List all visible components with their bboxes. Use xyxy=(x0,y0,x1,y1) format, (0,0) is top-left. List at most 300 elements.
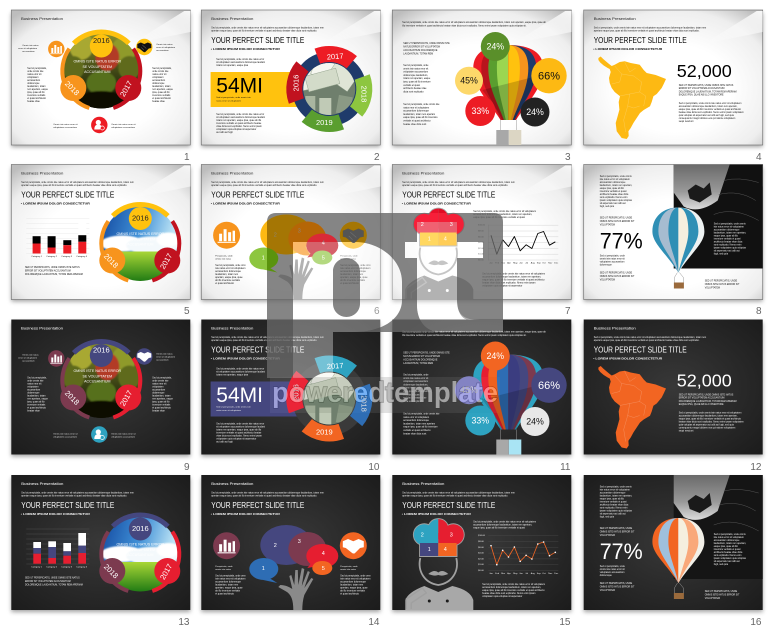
line chart: Aug xyxy=(531,572,535,575)
chart: money wheel: 2016 xyxy=(291,384,300,401)
text block: eaque ipsa, quae ab illo inventore xyxy=(403,426,438,429)
text block: Sed ut perspiciatis, unde xyxy=(600,254,626,258)
text block: dicta sunt explicabo xyxy=(403,90,424,93)
text block: doloremque xyxy=(600,264,613,266)
chart: puzzle circle xyxy=(60,341,141,424)
bar chart xyxy=(26,529,89,568)
text block: aperiam eaque ipsa, quae ab illo inventore veritatis et quasi architecto beatae vitae dicta sunt explicabo. xyxy=(402,184,508,187)
text block: rem aperiam, eaque xyxy=(27,398,49,400)
text block: Omnis iste natus error sit xyxy=(111,432,136,436)
text block: Omnis iste natus xyxy=(22,354,39,356)
text block: laudantium, totam rem aperiam xyxy=(403,422,435,425)
text block: inventore veritatis xyxy=(27,404,46,406)
text block: Sed ut perspiciatis, unde omn xyxy=(340,264,371,267)
chart: puzzle circle: OMNIS ISTE NATUS ERROR xyxy=(73,369,122,373)
text block: Sed ut perspiciatis, unde omnis iste natus error sit voluptatem accusantium doloremque laudantium, totam rem xyxy=(211,26,324,30)
line chart: Sep xyxy=(537,262,541,264)
hand xyxy=(278,258,313,300)
text block: ab illo inventore veritatis xyxy=(340,590,366,592)
chart: puzzle circle: 2016 xyxy=(93,36,110,45)
text block: voluptatem accusantium xyxy=(111,126,135,129)
text block: inventore veritatis et quasi xyxy=(714,238,741,240)
text block: dicta sunt explicabo xyxy=(403,400,424,403)
text block: laudantium, totam xyxy=(27,394,46,398)
text block: Sed ut perspiciatis, unde omnis iste natus error sit voluptatem accusantium doloremque laudantium, totam rem aperiam, eaque ipsa, quae ab xyxy=(402,21,547,24)
line chart: $4.00 xyxy=(478,552,485,554)
chart: puzzle circle: SE VOLUPTATEM xyxy=(125,238,155,242)
line chart: $6.00 xyxy=(478,547,485,549)
chart: puzzle circle: ACCUSANTIUM xyxy=(127,242,153,246)
text block: VOLUPTATEM xyxy=(600,589,615,592)
text block: error sit voluptatem xyxy=(156,46,175,49)
text block: architecto beatae vitae dicta xyxy=(600,193,629,196)
line chart xyxy=(478,224,559,264)
text block: DOLOREMQUE LAUDANTIUM, TOTAM REM APERIAM xyxy=(679,90,737,93)
text block: VOLUPTATEM xyxy=(705,597,720,600)
line chart xyxy=(478,535,559,575)
text block: OMNIS ISTE NATUS ERROR SIT xyxy=(600,220,635,223)
data circle 66%: 66% xyxy=(538,70,560,82)
text block: accusantium xyxy=(27,388,40,392)
line chart: Mar xyxy=(501,572,505,575)
text block: inventore veritatis et quasi xyxy=(600,190,627,193)
page number: 7 xyxy=(565,306,571,317)
chart: puzzle circle xyxy=(60,32,141,115)
subtitle: • LOREM IPSUM DOLOR CONSECTETUR xyxy=(21,512,91,516)
text block: error sit voluptatem xyxy=(18,47,37,50)
text block: VOLUPTATEM xyxy=(705,286,720,290)
text block: eaque ipsa, quae ab illo xyxy=(714,236,739,238)
text block: aut odit aut fugit xyxy=(216,440,233,444)
text block: aperiam, eaque ipsa, quae xyxy=(340,586,368,590)
chart: puzzle circle: ACCUSANTIUM xyxy=(84,380,110,384)
line chart: May xyxy=(513,262,518,264)
text block: SED UT PERSPICIATIS, UNDE OMNIS ISTE NATUS xyxy=(25,266,80,269)
text block: natus error sit xyxy=(152,73,167,76)
subtitle: • LOREM IPSUM DOLOR CONSECTETUR xyxy=(211,202,281,206)
text block: VOLUPTATEM xyxy=(600,278,615,282)
data circle 66% xyxy=(531,368,567,403)
text block: laudantium, totam xyxy=(152,394,171,398)
line chart: May xyxy=(513,573,518,575)
text block: laudantium, totam rem xyxy=(340,584,363,586)
text block: laudantium, totam rem xyxy=(340,273,363,276)
text block: eaque ipsa, quae ab illo inventore veritatis et quasi xyxy=(473,216,525,219)
line chart: Feb xyxy=(495,573,500,575)
data circle 33% xyxy=(465,406,495,436)
photo: puzzle panel xyxy=(674,164,763,268)
text block: sit aspernatur aut odit aut xyxy=(714,250,740,252)
icon: handshake xyxy=(340,532,367,559)
text block: Sed ut perspiciatis, unde omnis iste natus error sit voluptatem accusantium doloremque laudantium, totam rem xyxy=(211,336,324,339)
text block: iste natus error sit voluptatem xyxy=(714,226,744,228)
icon: chef puzzle xyxy=(405,518,473,610)
icon: chef puzzle: 1 xyxy=(428,236,431,242)
text block: iste natus error sit voluptatem xyxy=(340,267,371,270)
text block: omnis iste natus xyxy=(215,568,232,571)
text block: ipsa, quae ab illo inventore xyxy=(403,80,431,84)
data circle 24%: 24% xyxy=(486,351,504,361)
text block: beatae vitae xyxy=(27,410,41,412)
text block: eaque ipsa, quae ab illo inventore veritatis et quasi architecto xyxy=(679,418,742,420)
text block: Omnis iste natus error sit xyxy=(111,123,136,126)
stat: 77% xyxy=(600,539,643,564)
text block: ACCUSANTIUM DOLOREMQUE xyxy=(403,49,438,52)
text block: illo inventore veritatis et quasi architecto beatae vitae dicta sunt explicabo. Nemo enim ipsam voluptatem quia voluptas sit. xyxy=(402,24,527,28)
text block: Sed ut perspiciatis, unde omnis iste natus error sit voluptatem accusantium doloremque laudantium, totam rem xyxy=(21,492,134,494)
line chart: $10.00 xyxy=(478,535,486,537)
text block: ab illo inventore veritatis xyxy=(215,590,241,592)
text block: laudantium, totam xyxy=(27,85,46,88)
title: YOUR PERFECT SLIDE TITLE xyxy=(21,500,115,510)
title: YOUR PERFECT SLIDE TITLE xyxy=(21,190,115,200)
panel: slide 1 apple puzzle xyxy=(11,10,190,147)
title: YOUR PERFECT SLIDE TITLE xyxy=(402,190,496,200)
text block: Sed ut perspiciatis, unde omnis iste xyxy=(403,103,440,106)
text block: iste natus error sit voluptatem xyxy=(215,267,246,270)
data circle 45% xyxy=(455,376,483,404)
basket xyxy=(496,440,521,454)
text block: accusantium doloremque laudantium, totam rem aperiam, xyxy=(679,105,738,108)
text block: beatae vitae dicta sunt xyxy=(403,123,427,126)
text block: Sed ut perspiciatis, unde omnis iste natus error sit voluptatem xyxy=(473,520,536,524)
text block: iste natus error sit voluptatem xyxy=(340,578,371,580)
text block: accusantium doloremque xyxy=(600,181,626,184)
page number: 9 xyxy=(184,462,190,473)
chart: puzzle circle: 2017 xyxy=(158,252,174,271)
text block: accusantium xyxy=(156,358,169,362)
text block: veritatis et quasi architecto xyxy=(403,429,431,432)
text block: totam rem aperiam, eaque ipsa, quae ab illo xyxy=(216,119,262,122)
text block: accusantium doloremque xyxy=(215,580,242,584)
icon: chef puzzle: 3 xyxy=(450,532,453,538)
chart: puzzle circle: 2018 xyxy=(63,79,81,97)
text block: et quasi architecto xyxy=(215,282,235,285)
line chart: Apr xyxy=(507,262,511,264)
line chart: Feb xyxy=(495,262,500,264)
text block: OMNIS ISTE NATUS ERROR SIT xyxy=(705,594,740,596)
title: YOUR PERFECT SLIDE TITLE xyxy=(211,500,305,510)
text block: ERROR SIT VOLUPTATEM ACCUSANTIUM xyxy=(679,87,724,90)
text block: laudantium, totam rem aperiam, xyxy=(714,232,746,234)
text block: et quasi architecto xyxy=(340,592,360,596)
text block: totam rem aperiam, eaque ipsa, quae ab illo xyxy=(216,428,262,432)
text block: fugit, sed quia xyxy=(600,516,615,518)
data circle 24% xyxy=(520,98,550,126)
panel: slide 7 chef xyxy=(392,164,571,302)
speech bubbles: 3 xyxy=(298,228,301,234)
text block: eaque ipsa, quae ab illo inventore veritatis et quasi architecto xyxy=(679,108,742,111)
text block: laudantium, totam rem aperiam, xyxy=(600,494,632,498)
text block: sunt explicabo. Nemo enim xyxy=(714,244,741,246)
text block: architecto beatae vitae xyxy=(403,87,427,90)
panel: slide 2 54MI xyxy=(201,10,380,147)
text block: eaque ipsa, quae ab illo inventore veritatis et quasi architecto xyxy=(482,278,545,282)
text block: voluptatem xyxy=(27,386,39,388)
speech bubbles: 1 xyxy=(262,256,265,262)
text block: accusantium xyxy=(152,79,165,82)
text block: sunt explicabo. Nemo enim xyxy=(600,196,627,199)
page number: 14 xyxy=(368,617,380,628)
balloon xyxy=(652,518,704,599)
chart: money wheel: 2019 xyxy=(316,118,333,127)
text block: doloremque laudantium, xyxy=(403,383,428,386)
bar chart: Category 4 xyxy=(76,255,88,258)
text block: EAQUE IPSA, QUAE AB ILLO INVENTORE xyxy=(679,403,724,406)
bar chart: Category 1 xyxy=(31,255,43,258)
text block: vitae dicta sunt explicabo. Nemo enim ipsam xyxy=(216,434,262,438)
text block: unde omnis iste xyxy=(27,70,44,73)
heading: business presentation: Business Presentation xyxy=(21,326,63,330)
page number: 16 xyxy=(750,617,762,628)
text block: omnis iste natus error sit xyxy=(403,377,429,380)
line chart: Oct xyxy=(542,262,546,264)
text block: Sed ut perspiciatis, unde omnis iste natus error sit voluptatem xyxy=(679,102,741,105)
text block: Sed ut perspiciatis, unde omnis xyxy=(600,175,632,178)
text block: OMNIS ISTE NATUS ERROR SIT xyxy=(600,275,635,278)
line chart: Apr xyxy=(507,572,511,575)
text block: VOLUPTATEM xyxy=(600,224,615,226)
panel: slide 14 dark speech bubbles xyxy=(201,475,380,612)
text block: accusantium doloremque xyxy=(600,492,626,494)
text block: ipsa, quae ab illo xyxy=(152,92,170,94)
text block: Perspiciatis, unde xyxy=(215,565,233,568)
text block: laudantium, totam rem aperiam, xyxy=(600,184,632,187)
text block: accusantium xyxy=(152,388,165,392)
line chart: Dec xyxy=(554,573,559,575)
text block: aperiam eaque ipsa, quae ab illo inventore veritatis et quasi architecto beatae vitae dicta sunt explicabo. xyxy=(21,494,127,498)
chart: puzzle circle: OMNIS ISTE NATUS ERROR xyxy=(73,60,122,64)
text block: Sed ut perspiciatis, unde omnis iste natus error sit voluptatem xyxy=(679,412,741,414)
text block: fugit, sed quia xyxy=(714,252,729,256)
text block: Sed ut perspiciatis, unde omnis iste natus error sit voluptatem xyxy=(473,210,536,213)
text block: accusantium doloremque xyxy=(403,419,430,422)
heading: business presentation: Business Presentation xyxy=(21,17,63,21)
subtitle: • LOREM IPSUM DOLOR CONSECTETUR xyxy=(402,202,472,206)
text block: iste natus error sit voluptatem xyxy=(215,578,246,580)
text block: SED UT PERSPICIATIS, UNDE xyxy=(600,272,633,274)
heading: business presentation: Business Presentation xyxy=(211,172,253,176)
text block: Sed ut perspiciatis, unde omnis iste natus error sit voluptatem xyxy=(482,583,545,586)
watermark: wordmark: poweredtemplate xyxy=(272,377,498,409)
text block: Omnis iste natus error sit xyxy=(53,123,78,126)
text block: architecto beatae vitae dicta xyxy=(714,240,743,244)
text block: natus error sit xyxy=(27,382,42,386)
subtitle: • LOREM IPSUM DOLOR CONSECTETUR xyxy=(211,356,281,360)
title: YOUR PERFECT SLIDE TITLE xyxy=(402,500,496,510)
text block: VOLUPTATEM xyxy=(600,534,615,537)
text block: SED UT PERSPICIATIS, UNDE xyxy=(600,582,633,585)
text block: omnis iste natus xyxy=(340,258,357,260)
speech bubbles: 5 xyxy=(322,566,325,572)
text block: Sed ut perspiciatis, xyxy=(27,376,47,380)
text block: Sed ut perspiciatis, unde omnis xyxy=(714,533,746,536)
text block: sit voluptatem accusantium doloremque laudant xyxy=(216,116,265,119)
icon: handshake xyxy=(136,39,152,55)
line chart: Jul xyxy=(525,262,529,264)
line chart: $0.00 xyxy=(478,570,485,572)
text block: sit aspernatur aut odit aut xyxy=(714,560,740,563)
text block: laudantium, totam rem xyxy=(215,273,238,276)
panel: slide 3 balloon xyxy=(392,10,571,147)
stat: 77% xyxy=(600,228,643,254)
text block: voluptatem xyxy=(27,76,39,79)
text block: eaque ipsa, quae ab illo xyxy=(714,546,739,548)
text block: SED UT PERSPICIATIS, UNDE xyxy=(600,527,633,530)
speech bubbles xyxy=(249,525,338,583)
text block: NATUS ERROR SIT VOLUPTATEM xyxy=(403,46,440,48)
icon: person xyxy=(91,426,108,443)
text block: beatae vitae dicta sunt explicabo. Nemo enim ipsam voluptatem xyxy=(679,420,744,424)
band: yellow stat xyxy=(211,72,301,107)
text block: aperiam eaque ipsa, quae ab illo inventore veritatis et quasi architecto beatae vitae dicta sunt explicabo. xyxy=(211,494,317,498)
text block: Sed ut perspiciatis, unde omn xyxy=(215,264,246,267)
chart: money wheel: 2018 xyxy=(359,86,368,102)
text block: OMNIS ISTE NATUS ERROR SIT xyxy=(600,586,635,588)
text block: ACCUSANTIUM DOLOREMQUE xyxy=(403,358,438,362)
bar chart: Category 1 xyxy=(31,566,43,568)
line chart: $8.00 xyxy=(478,230,485,232)
text block: LAUDANTIUM, TOTAM REM xyxy=(403,362,433,365)
text block: aperiam eaque ipsa, quae ab illo inventore veritatis et quasi architecto beatae vitae dicta sunt explicabo. xyxy=(211,184,317,187)
text block: voluptatem quia voluptas sit aspernatur xyxy=(216,438,256,440)
chart: money wheel: 2018 xyxy=(359,395,368,412)
subtitle: • LOREM IPSUM DOLOR CONSECTETUR xyxy=(21,202,91,206)
chart: puzzle circle xyxy=(99,515,180,592)
text block: eaque ipsa, quae ab illo inventore veritatis et quasi architecto xyxy=(482,589,545,592)
data circle 24% xyxy=(481,32,510,61)
text block: accusantium doloremque laudantium, totam rem aperiam, xyxy=(482,586,541,589)
text block: veritatis et quasi xyxy=(403,393,420,396)
heading: business presentation: Business Presentation xyxy=(21,172,63,176)
text block: ERROR SIT VOLUPTATEM ACCUSANTIUM xyxy=(25,580,71,583)
text block: totam rem aperiam, eaque xyxy=(403,387,431,390)
heading: business presentation: Business Presentation xyxy=(594,17,636,21)
text block: aut odit aut fugit xyxy=(216,131,233,134)
line chart: $8.00 xyxy=(478,541,485,543)
chart: puzzle circle: 2016 xyxy=(93,346,110,354)
text block: Sed ut perspiciatis, unde omnis iste natus error sit voluptatem accusantium doloremque laudantium, totam rem xyxy=(402,181,515,184)
text block: aperiam eaque ipsa, quae ab illo inventore veritatis et quasi architecto beatae vitae dicta sunt explicabo. xyxy=(211,30,317,32)
bar chart: Category 3 xyxy=(61,255,73,258)
text block: Perspiciatis, unde xyxy=(215,254,233,258)
text block: sit voluptatem accusantium doloremque laudant xyxy=(216,426,265,428)
data circle 24% xyxy=(481,342,510,370)
text block: ipsam voluptatem quia voluptas xyxy=(714,246,747,250)
heading: business presentation: Business Presentation xyxy=(594,326,636,330)
text block: voluptatem accusantium xyxy=(403,380,428,383)
line chart: $0.00 xyxy=(478,260,485,262)
text block: iste natus error sit voluptatem xyxy=(714,536,744,539)
text block: sunt explicabo. Nemo enim xyxy=(600,506,627,510)
chart: money wheel xyxy=(291,51,368,127)
text block: quia voluptas sit aspernatur aut odit aut fugit, sed quia xyxy=(679,114,734,117)
stat: 54MI xyxy=(216,74,263,98)
text block: et quasi architecto xyxy=(215,592,235,596)
line chart: Aug xyxy=(531,262,535,264)
title: YOUR PERFECT SLIDE TITLE xyxy=(594,344,687,354)
chart: puzzle circle: 2018 xyxy=(63,389,81,407)
text block: accusantium doloremque laudantium, totam rem aperiam, xyxy=(482,276,541,278)
text block: accusantium doloremque xyxy=(714,539,740,542)
text block: doloremque xyxy=(27,392,40,394)
text block: accusantium xyxy=(22,360,35,362)
text block: ipsa, quae ab illo xyxy=(27,92,45,94)
text block: sit voluptatem accusantium doloremque laudant xyxy=(216,370,265,374)
map: south america xyxy=(598,366,666,448)
chart: puzzle circle: 2016 xyxy=(132,214,149,222)
text block: veritatis et quasi xyxy=(403,84,420,87)
text block: accusantium doloremque laudantium, totam rem aperiam, xyxy=(473,524,532,526)
text block: ERROR SIT VOLUPTATEM ACCUSANTIUM xyxy=(679,397,724,400)
heading: business presentation: Business Presentation xyxy=(402,172,444,176)
text block: Sed ut perspiciatis, unde omnis iste natus error sit voluptatem accusantium doloremque laudantium, totam rem xyxy=(21,181,134,184)
text block: Omnis iste natus xyxy=(22,44,39,47)
stat: 52,000 xyxy=(677,61,732,81)
icon: bar chart xyxy=(48,350,64,367)
chart: money wheel: 2019 xyxy=(316,428,333,436)
text block: Sed ut perspiciatis, unde omnis iste natus error sit voluptatem accusantium doloremque laudantium, totam rem xyxy=(211,181,324,184)
text block: inventore veritatis et quasi architecto beatae xyxy=(216,122,262,125)
text block: et quasi architecto xyxy=(340,282,360,285)
icon: bar chart xyxy=(213,222,240,249)
text block: ERROR SIT VOLUPTATEM ACCUSANTIUM xyxy=(25,270,71,272)
title: YOUR PERFECT SLIDE TITLE xyxy=(594,35,687,45)
chart: puzzle circle: OMNIS ISTE NATUS ERROR xyxy=(116,542,165,546)
icon: chef puzzle: 4 xyxy=(444,547,447,553)
stat: 54MI xyxy=(216,384,263,407)
text block: Sed ut perspiciatis, unde omnis xyxy=(600,486,632,488)
page number: 2 xyxy=(374,152,380,163)
text block: voluptatem quia voluptas sit aspernatur xyxy=(482,284,522,288)
chart: puzzle circle: ACCUSANTIUM xyxy=(84,70,110,74)
data circle 45%: 45% xyxy=(460,76,478,86)
subtitle: • LOREM IPSUM DOLOR CONSECTETUR xyxy=(402,512,472,516)
chart: puzzle circle xyxy=(99,204,180,282)
text block: aperiam, eaque ipsa, quae xyxy=(215,586,243,590)
balloon xyxy=(652,208,704,288)
line chart: $4.00 xyxy=(478,242,485,244)
text block: eaque ipsa, quae ab illo xyxy=(600,188,625,190)
photo: puzzle panel xyxy=(674,475,763,579)
basket xyxy=(496,130,521,145)
text block: SED UT PERSPICIATIS, UNDE OMNIS ISTE xyxy=(403,42,450,45)
text block: fugit, sed quia xyxy=(714,563,729,566)
text block: veritatis et quasi architecto xyxy=(403,120,431,122)
text block: sequi nesciunt xyxy=(679,430,694,432)
text block: aperiam eaque ipsa, quae ab illo inventore veritatis et quasi architecto beatae vitae dicta sunt explicabo. xyxy=(594,339,700,342)
line chart: Nov xyxy=(548,573,553,575)
text block: Sed ut perspiciatis, unde xyxy=(403,374,429,376)
panel: slide 13 dark bars and sky puzzle xyxy=(11,475,190,612)
line chart: Jun xyxy=(519,573,524,575)
line chart: Jun xyxy=(519,262,524,264)
line chart: $2.00 xyxy=(478,558,485,560)
text block: Sed ut perspiciatis, unde omnis iste xyxy=(403,412,440,416)
text block: error sit voluptatem xyxy=(156,356,175,358)
text block: voluptatem xyxy=(152,76,164,79)
panel: slide 15 dark chef xyxy=(392,475,571,612)
text block: omnis iste natus xyxy=(340,568,357,571)
text block: SED UT PERSPICIATIS, UNDE OMNIS ISTE NATUS xyxy=(25,576,80,580)
text block: omnis iste natus error sit xyxy=(403,67,429,70)
data circle 45%: 45% xyxy=(460,385,478,395)
chart: puzzle circle: ACCUSANTIUM xyxy=(127,553,153,557)
text block: doloremque xyxy=(152,82,165,85)
text block: doloremque xyxy=(152,392,165,394)
text block: Sed ut perspiciatis, unde omnis iste natus error sit voluptatem accusantium doloremque laudantium, totam rem xyxy=(211,492,324,494)
icon: chef puzzle: 2 xyxy=(421,532,424,538)
